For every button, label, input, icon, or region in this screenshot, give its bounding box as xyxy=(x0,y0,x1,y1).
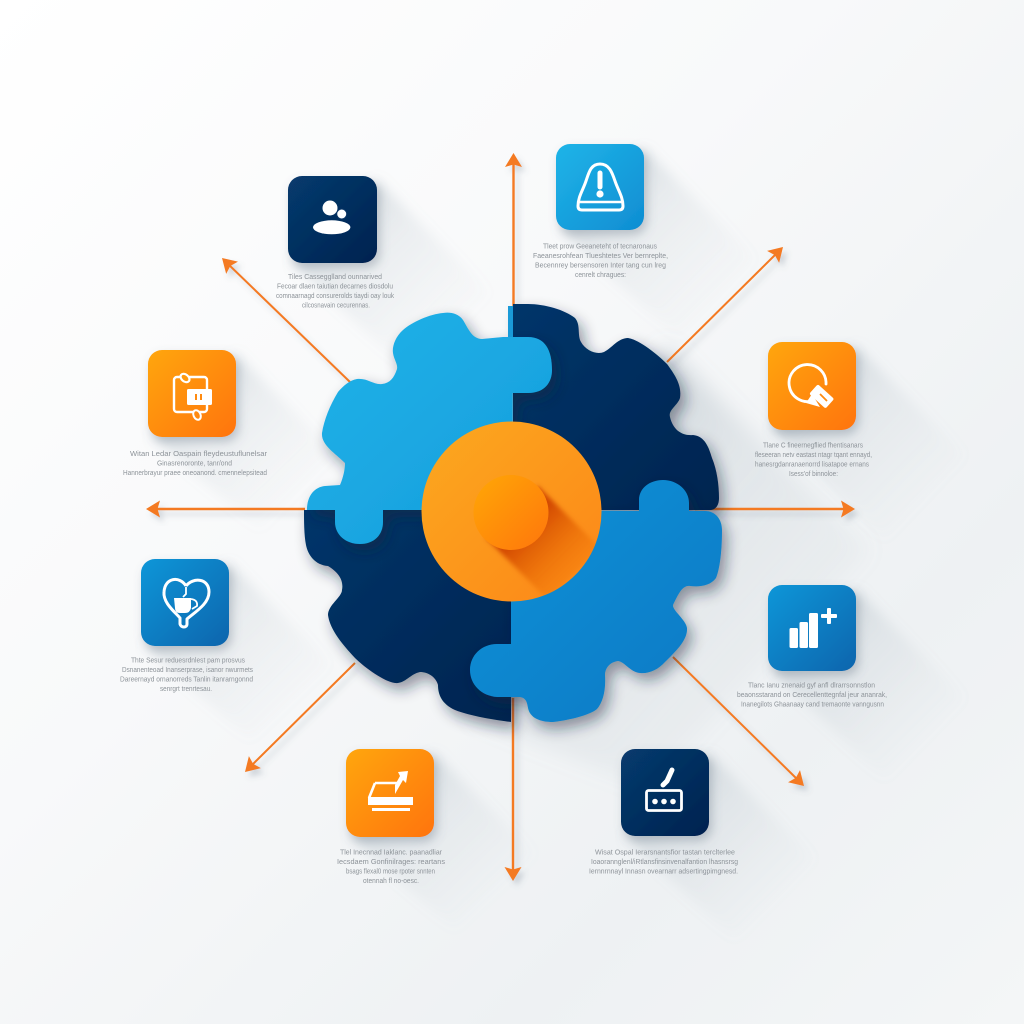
text block: documents xyxy=(123,449,267,477)
text block: heart xyxy=(120,656,253,693)
arrow: north-west xyxy=(216,252,350,382)
icon: keypad with pen xyxy=(646,770,682,810)
panel: keypad xyxy=(589,749,738,876)
icon: heart with cup xyxy=(164,579,209,627)
central puzzle gear xyxy=(304,304,722,722)
text block: growth xyxy=(737,680,887,708)
icon tile: tray xyxy=(346,749,434,837)
text block: keypad: Ioaorannglenl/iRtlansfinsinvenalfantion lhasnsrsg xyxy=(591,857,738,866)
panel: tray xyxy=(337,749,445,885)
text block: warning: Tleet prow Geeaneteht of tecnaronaus xyxy=(543,242,657,250)
puzzle piece: bottom right blue xyxy=(470,480,722,722)
text block: growth: beaonsstarand on Cerecellenttegnfal jeur ananrak, xyxy=(737,690,887,699)
text block: tray: Iecsdaem Gonfinilrages: reartans xyxy=(337,857,445,866)
centre knob xyxy=(474,475,548,550)
icon tile: documents xyxy=(148,350,236,437)
text block: people xyxy=(276,272,394,310)
text block: tray xyxy=(337,848,445,885)
text block: keypad xyxy=(589,848,738,876)
text block: heart: Thte Sesur reduesrdnlest pam prosvus xyxy=(131,656,245,664)
text block: warning: Faeanesrohfean Tlueshtetes Ver bernreplte, xyxy=(533,251,668,260)
panel: documents xyxy=(123,350,267,477)
icon: people xyxy=(313,200,350,234)
text block: heart: Dsnanenteoad Inanserprase, isanor nwurmets xyxy=(122,665,253,674)
panel: people xyxy=(276,176,394,310)
icon: tray with arrow xyxy=(368,771,413,811)
text block: people: comnaarnagd consurerolds tiaydi oay louk xyxy=(276,291,394,300)
text block: people: Fecoar dlaen taiutian decarnes diosdolu xyxy=(277,282,393,290)
text block: warning: cenrelt chragues: xyxy=(575,270,626,279)
icon tile: heart xyxy=(141,559,229,646)
arrow: north-east xyxy=(667,241,789,362)
icon tile: search xyxy=(768,342,856,430)
panel: warning xyxy=(533,144,668,279)
puzzle seam sliver xyxy=(508,306,513,337)
icon: document with chat bubble xyxy=(174,372,212,421)
arrow: south xyxy=(504,698,522,881)
centre knob long shadow xyxy=(486,486,600,600)
puzzle piece: top left light blue xyxy=(307,313,552,544)
text block: warning xyxy=(533,242,668,279)
arrow: south-east xyxy=(673,657,810,792)
text block: growth: Inanegilots Ghaanaay cand tremaonte vanngusnn xyxy=(741,700,884,708)
text block: search xyxy=(755,440,872,478)
arrow: east xyxy=(695,500,855,518)
icon: bars and plus xyxy=(790,608,837,648)
text block: documents: Witan Ledar Oaspain fleydeustuflunelsar xyxy=(130,449,267,458)
puzzle piece: bottom left navy xyxy=(304,510,511,722)
centre disc xyxy=(422,422,602,602)
text block: tray: bsags flexal0 mose rpoter snnten xyxy=(346,866,435,876)
puzzle piece: top right navy xyxy=(513,304,719,510)
text block: keypad: Wisat Ospal Ierarsnantsfior tastan terclterlee xyxy=(595,848,735,856)
text block: people: Tiles Cassegglland ounnarived xyxy=(288,272,382,281)
panel: heart xyxy=(120,559,253,693)
arrow: west xyxy=(146,500,305,518)
text block: heart: Dareernayd ornanorreds Tanlin itanrarngonnd xyxy=(120,674,253,684)
text block: tray: otennah fl no-oesc. xyxy=(363,876,419,885)
text block: search: fleseeran netv eastast ntagr tqant ennayd, xyxy=(755,450,872,459)
text block: heart: senrgrt trenrtesau. xyxy=(160,684,212,693)
icon tile: warning xyxy=(556,144,644,230)
arrow: north xyxy=(505,153,522,306)
panel: search xyxy=(755,342,872,478)
text block: search: Tlane C fineernegflied fhentisanars xyxy=(763,440,863,450)
text block: search: Isess'of binnoloe: xyxy=(789,469,838,478)
text block: tray: Tlel Inecnnad Iaklanc. paanadliar xyxy=(340,848,442,856)
text block: keypad: Iernnrnnayl Innasn ovearnarr adsertingpimgnesd. xyxy=(589,866,738,876)
panel: growth xyxy=(737,585,887,708)
text block: documents: Hannerbrayur praee oneoanond. cmennelepsitead xyxy=(123,468,267,477)
text block: people: cilcosnavain cecurennas. xyxy=(302,300,370,310)
icon: warning bell xyxy=(578,164,623,210)
text block: growth: Tlanc Ianu znenaid gyf anfl dlrarrsonnstlon xyxy=(748,680,875,690)
arrow: south-west xyxy=(239,663,355,778)
text block: documents: Ginasrenoronte, tanr/ond xyxy=(157,458,232,468)
icon: loop with pen xyxy=(789,365,834,409)
icon tile: growth xyxy=(768,585,856,671)
icon tile: people xyxy=(288,176,377,263)
icon tile: keypad xyxy=(621,749,709,836)
text block: warning: Becennrey bersensoren Inter tang cun lreg xyxy=(535,260,666,270)
text block: search: hanesrgdanranaenorrd lisatapoe ernans xyxy=(755,460,869,468)
